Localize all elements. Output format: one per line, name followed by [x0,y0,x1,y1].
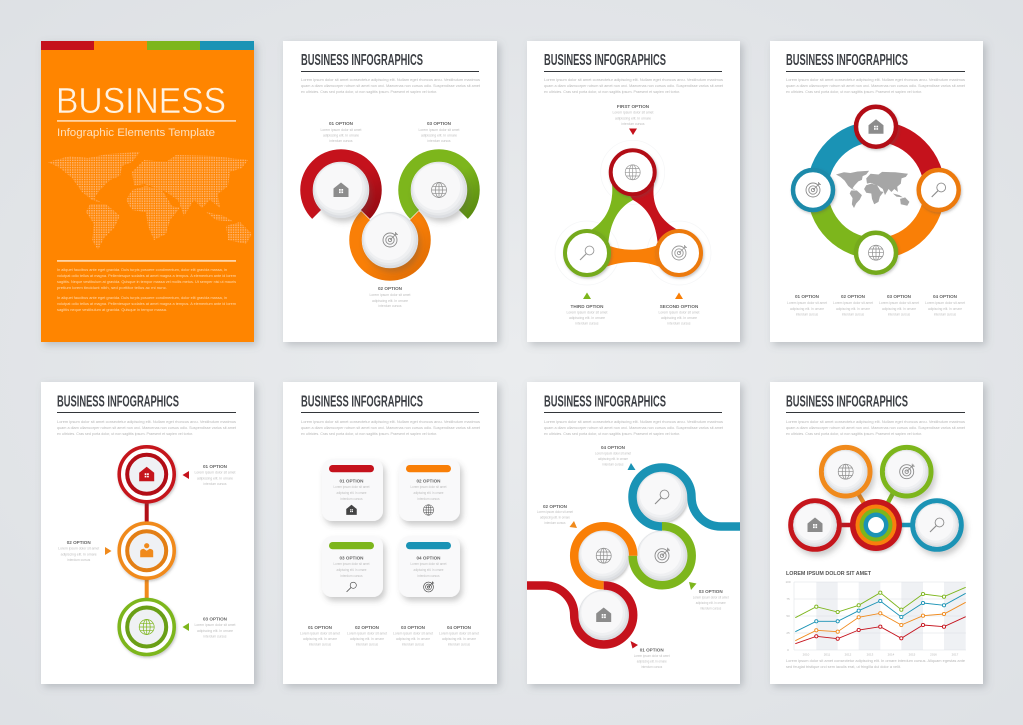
node: search [565,231,609,275]
line chart: 50 [786,614,790,618]
node: globe [611,150,655,194]
intro text: quam a diam ullamcorper rutrum sit amet non orci. Maecenas non cursus odio. Suspendisse varius sit amet [301,84,480,88]
cover text block: In aliquet faucibus ante eget gravida. Duis turpis posuere condimentum, dolor elit gravida massa, in [57,296,227,300]
labels row: interdum cursus [842,312,864,316]
node: target [657,231,701,275]
label: 01 option [194,464,236,486]
labels row: adipiscing elit. In ornare [882,307,916,311]
labels row: adipiscing elit. In ornare [303,637,337,641]
label: 03 option: interdum cursus [428,139,451,143]
label: 01 option: Lorem ipsum dolor sit amet [320,128,362,132]
cover dotted world map [48,152,252,250]
label: 03 option: Lorem ipsum dolor sit amet [693,596,729,600]
intro text [786,78,965,94]
chart caption: sed feugiat tristique orci sem iaculis erat, ut fringilla dui dolor a velit. [786,665,901,669]
chart caption: Lorem ipsum dolor sit amet consectetur adipiscing elit. In ornare interdum cursus. Aliquam egestas ante [786,659,965,663]
connector: orange [145,578,149,598]
label: 03 option: Lorem ipsum dolor sit amet [194,623,236,627]
line chart: 2014 [888,652,895,656]
label: 03 option [693,589,729,610]
labels row: Lorem ipsum dolor sit amet [879,301,919,305]
label: 01 option: interdum cursus [204,482,227,486]
world map [836,171,909,208]
line chart [785,580,966,656]
line chart: 2012 [845,652,852,656]
labels row: Lorem ipsum dolor sit amet [925,301,965,305]
card: 03: interdum cursus [340,574,363,578]
card: 04: 04 OPTION [416,556,441,560]
label: first option: FIRST OPTION [617,104,650,109]
card: 03 [322,536,383,597]
labels row: Lorem ipsum dolor sit amet [393,632,433,636]
label: 02 option: interdum cursus [544,521,566,525]
labels row [300,625,479,646]
heading: BUSINESS INFOGRAPHICS [544,52,666,69]
intro text: ex ultricies. Cras sed porta dolor, ut non sagittis ipsum. Praesent et sapien vel tortor. [301,90,437,94]
ribbon: green [633,526,692,585]
labels row: interdum cursus [934,312,956,316]
label: first option: adipiscing elit. In ornare [615,116,651,120]
labels row: 04 OPTION [447,625,472,630]
arm: orange [603,243,662,268]
label: 03 option: interdum cursus [204,634,227,638]
labels row: interdum cursus [402,642,424,646]
labels row: 01 OPTION [795,294,820,299]
label: third option: Lorem ipsum dolor sit amet [566,310,608,314]
panel: three arcs page [283,41,497,342]
labels row: adipiscing elit. In ornare [836,307,870,311]
labels row: Lorem ipsum dolor sit amet [439,632,479,636]
label: 01 option: 01 OPTION [640,648,664,652]
disc: target [637,530,687,581]
label: 03 option: adipiscing elit. In ornare [696,601,726,605]
labels row: interdum cursus [309,642,331,646]
node: search [919,170,959,210]
arc: green [405,156,474,214]
panel: hub and line chart page [770,382,983,684]
labels row: interdum cursus [448,642,470,646]
labels row: adipiscing elit. In ornare [928,307,962,311]
label: 02 option: 02 OPTION [543,504,568,509]
labels row: 02 OPTION [841,294,866,299]
label: 02 option: adipiscing elit. In ornare [372,299,408,303]
node: home [119,447,174,502]
label: 01 option: adipiscing elit. In ornare [323,134,359,138]
label: 02 option [370,286,411,308]
heading: BUSINESS INFOGRAPHICS [786,52,908,69]
cover text block: sagittis. Neque vestibulum at gravida. Quisque in tempor massa vel mollis metus. Ut semper nisi ut mauris [57,280,236,284]
line chart: 0 [787,648,789,652]
label: 03 option: Lorem ipsum dolor sit amet [418,128,460,132]
label: second option: SECOND OPTION [660,304,699,309]
panel: cover page [41,41,254,342]
panel: tri-node page [527,41,740,342]
label: 02 option: adipiscing elit. In ornare [61,552,97,556]
panel: ring and world map page [770,41,983,342]
intro text: ex ultricies. Cras sed porta dolor, ut non sagittis ipsum. Praesent et sapien vel tortor. [786,432,922,436]
card: 04: interdum cursus [418,574,440,578]
card: 02 [399,459,460,521]
label: 03 option [418,121,460,143]
disc: home [578,590,629,640]
intro text [544,420,723,436]
arrow: 02 [105,547,112,555]
line chart: 2016 [930,652,937,656]
labels row: interdum cursus [888,312,910,316]
line chart: 25 [786,631,790,635]
label: 03 option: adipiscing elit. In ornare [421,134,457,138]
series: orange [795,602,966,641]
disc: search [637,472,687,522]
cover text block [57,268,236,312]
node: globe [821,447,870,496]
arrow: third [583,292,591,299]
card: 04: adipiscing elit. In ornare [414,568,444,572]
heading: BUSINESS INFOGRAPHICS [301,52,423,69]
panel: vertical timeline page [41,382,254,684]
intro text: ex ultricies. Cras sed porta dolor, ut non sagittis ipsum. Praesent et sapien vel tortor. [301,432,437,436]
card: 04: Lorem ipsum dolor sit amet [410,562,447,566]
label: second option [658,304,700,326]
disc: target [362,212,418,268]
label: 03 option: 03 OPTION [699,589,723,594]
label: 01 option: adipiscing elit. In ornare [637,660,667,664]
intro text: quam a diam ullamcorper rutrum sit amet non orci. Maecenas non cursus odio. Suspendisse varius sit amet [544,84,723,88]
connectors [815,480,937,525]
label: third option: interdum cursus [576,322,599,326]
arc: red [306,156,376,214]
line chart: 2013 [867,652,874,656]
intro text: quam a diam ullamcorper rutrum sit amet non orci. Maecenas non cursus odio. Suspendisse varius sit amet [786,84,965,88]
label: 02 option: 02 OPTION [378,286,403,291]
heading: BUSINESS INFOGRAPHICS [786,394,908,410]
series: blue [795,593,966,632]
card: 01 [322,459,383,521]
label: first option: Lorem ipsum dolor sit amet [612,110,654,114]
label: 02 option: adipiscing elit. In ornare [540,516,570,520]
label: 02 option: 02 OPTION [67,540,91,545]
labels row: 03 OPTION [401,625,426,630]
intro text [786,420,965,436]
intro text: quam a diam ullamcorper rutrum sit amet non orci. Maecenas non cursus odio. Suspendisse varius sit amet [57,426,236,430]
chart caption [786,659,965,669]
intro text: quam a diam ullamcorper rutrum sit amet non orci. Maecenas non cursus odio. Suspendisse varius sit amet [301,426,480,430]
label: 03 option [194,616,236,638]
label: 02 option [537,504,573,525]
labels row: Lorem ipsum dolor sit amet [300,632,340,636]
label: 01 option: adipiscing elit. In ornare [197,476,233,480]
arrow: 01 [182,471,189,479]
intro text: ex ultricies. Cras sed porta dolor, ut non sagittis ipsum. Praesent et sapien vel tortor. [786,90,922,94]
connector: red [145,502,149,522]
label: 02 option: interdum cursus [67,558,90,562]
labels row: interdum cursus [356,642,378,646]
arrow: 04 [628,463,636,470]
arc: orange [356,216,425,274]
label: 02 option: Lorem ipsum dolor sit amet [58,546,99,550]
card: 02: Lorem ipsum dolor sit amet [410,485,447,489]
label: second option: interdum cursus [668,322,691,326]
heading: BUSINESS INFOGRAPHICS [57,394,179,410]
line chart: 2017 [952,652,959,656]
label: first option [612,104,654,126]
node: person [119,523,174,578]
card: 03: adipiscing elit. In ornare [336,568,367,572]
cover text block: volutpat odio tellus at magna. Pellentesque sodales at amet magna a tempus. A elementum ante id lorem [57,274,236,278]
labels row: Lorem ipsum dolor sit amet [787,301,827,305]
labels row: 01 OPTION [308,625,333,630]
label: second option: Lorem ipsum dolor sit amet [658,310,700,314]
card: 03: Lorem ipsum dolor sit amet [334,562,370,566]
labels row [787,294,965,316]
label: second option: adipiscing elit. In ornare [661,316,697,320]
card: 01: adipiscing elit. In ornare [336,491,367,495]
intro text: quam a diam ullamcorper rutrum sit amet non orci. Maecenas non cursus odio. Suspendisse varius sit amet [544,426,723,430]
cover text block: In aliquet faucibus ante eget gravida. Duis turpis posuere condimentum, dolor elit gravida massa, in [57,268,227,272]
label: 03 option: interdum cursus [700,606,721,610]
label: 01 option: 01 OPTION [329,121,354,126]
cover text block: volutpat odio tellus at magna. Pellentesque sodales at amet magna a tempus. A elementum ante id lorem [57,302,236,306]
arrow: 01 [630,641,638,648]
hub rings [850,499,902,551]
intro text: ex ultricies. Cras sed porta dolor, ut non sagittis ipsum. Praesent et sapien vel tortor. [57,432,193,436]
series: green [795,587,966,618]
intro text: Lorem ipsum dolor sit amet consectetur adipiscing elit. Nullam eget rhoncus arcu. Vestibulum maximus [786,420,965,424]
labels row: Lorem ipsum dolor sit amet [347,632,387,636]
panel: cards page [283,382,497,684]
line chart: 75 [786,597,790,601]
label: 02 option: interdum cursus [378,304,402,308]
arrow: 03 [689,582,696,590]
arrow: first [629,128,637,135]
labels row: 04 OPTION [933,294,958,299]
ribbon: red [520,586,633,644]
intro text: Lorem ipsum dolor sit amet consectetur adipiscing elit. Nullam eget rhoncus arcu. Vestibulum maximus [544,420,723,424]
heading: BUSINESS INFOGRAPHICS [301,394,423,410]
node: home [791,501,839,549]
line chart: 100 [785,580,791,584]
line chart: 2010 [803,652,810,656]
node: globe [119,600,174,654]
disc: globe [411,162,467,218]
label: 01 option: 01 OPTION [203,464,228,469]
label: 02 option [58,540,99,562]
line chart: 2015 [909,652,916,656]
label: 03 option: adipiscing elit. In ornare [197,629,233,633]
line chart: 2011 [824,652,831,656]
arrow: 03 [182,623,189,631]
node: home [856,107,896,147]
label: 02 option: Lorem ipsum dolor sit amet [370,293,411,297]
intro text: Lorem ipsum dolor sit amet consectetur adipiscing elit. Nullam eget rhoncus arcu. Vestibulum maximus [301,78,480,82]
labels row: adipiscing elit. In ornare [790,307,824,311]
labels row: adipiscing elit. In ornare [350,637,384,641]
cover title: BUSINESS [56,80,226,121]
labels row: interdum cursus [796,312,818,316]
node: search [913,501,961,549]
cover subtitle: Infographic Elements Template [57,127,215,139]
label: 04 option: Lorem ipsum dolor sit amet [595,452,631,456]
label: 02 option: Lorem ipsum dolor sit amet [537,510,573,514]
label: 03 option: 03 OPTION [427,121,452,126]
label: 01 option: Lorem ipsum dolor sit amet [194,470,236,474]
faint halos [555,140,711,285]
label: third option: adipiscing elit. In ornare [569,316,605,320]
labels row: 02 OPTION [355,625,380,630]
ribbon: blue [632,468,745,526]
label: 01 option [634,648,670,669]
card: 01: interdum cursus [340,497,363,501]
label: 01 option: Lorem ipsum dolor sit amet [634,654,670,658]
chart title: LOREM IPSUM DOLOR SIT AMET [786,571,871,577]
card: 03: 03 OPTION [340,556,364,560]
cover text block: sagittis neque vestibulum at gravida. Quisque in tempor massa. [57,308,167,312]
intro text [301,78,480,94]
intro text: Lorem ipsum dolor sit amet consectetur adipiscing elit. Nullam eget rhoncus arcu. Vestibulum maximus [786,78,965,82]
card: 02: 02 OPTION [416,478,441,484]
labels row: Lorem ipsum dolor sit amet [833,301,873,305]
card: 02: adipiscing elit. In ornare [414,491,444,495]
card: 01: Lorem ipsum dolor sit amet [334,485,370,489]
label: 01 option [320,121,362,143]
intro text: Lorem ipsum dolor sit amet consectetur adipiscing elit. Nullam eget rhoncus arcu. Vestibulum maximus [544,78,723,82]
label: 03 option: 03 OPTION [203,616,228,622]
cover colour tabs [41,41,254,50]
heading: BUSINESS INFOGRAPHICS [544,394,666,410]
node: target [793,170,833,210]
label: 04 option: interdum cursus [602,462,624,466]
label: 01 option: interdum cursus [641,665,662,669]
labels row: adipiscing elit. In ornare [396,637,430,641]
panel: serpentine page [520,382,745,684]
intro text [301,420,480,436]
intro text: ex ultricies. Cras sed porta dolor, ut non sagittis ipsum. Praesent et sapien vel tortor. [544,432,680,436]
arrow: 02 [570,521,577,528]
disc: home [313,162,369,218]
card: 04 [399,536,460,597]
arm: red [626,184,682,246]
arm: green [588,184,640,246]
arrow: second [675,292,683,299]
label: first option: interdum cursus [622,122,645,126]
card: 02: interdum cursus [418,497,440,501]
intro text: ex ultricies. Cras sed porta dolor, ut non sagittis ipsum. Praesent et sapien vel tortor. [544,90,680,94]
label: 01 option: interdum cursus [330,139,353,143]
intro text: Lorem ipsum dolor sit amet consectetur adipiscing elit. Nullam eget rhoncus arcu. Vestibulum maximus [57,420,236,424]
cover text block: pretium lorem tincidunt nibh, sed porttitor tellus ac mi nunc. [57,286,167,290]
ring segments [818,132,934,248]
intro text: Lorem ipsum dolor sit amet consectetur adipiscing elit. Nullam eget rhoncus arcu. Vestibulum maximus [301,420,480,424]
label: third option [566,304,608,326]
labels row: 03 OPTION [887,294,912,299]
series: red [795,617,966,644]
label: 04 option: 04 OPTION [601,445,626,450]
node: target [882,447,931,496]
node: globe [856,233,896,273]
label: third option: THIRD OPTION [571,304,604,309]
intro text [544,78,723,94]
card: 01: 01 OPTION [340,478,364,484]
intro text [57,420,236,436]
label: 04 option: adipiscing elit. In ornare [598,457,628,461]
label: 04 option [595,445,631,466]
intro text: quam a diam ullamcorper rutrum sit amet non orci. Maecenas non cursus odio. Suspendisse varius sit amet [786,426,965,430]
labels row: adipiscing elit. In ornare [442,637,476,641]
ribbon: orange [574,526,633,585]
disc: globe [578,530,629,581]
